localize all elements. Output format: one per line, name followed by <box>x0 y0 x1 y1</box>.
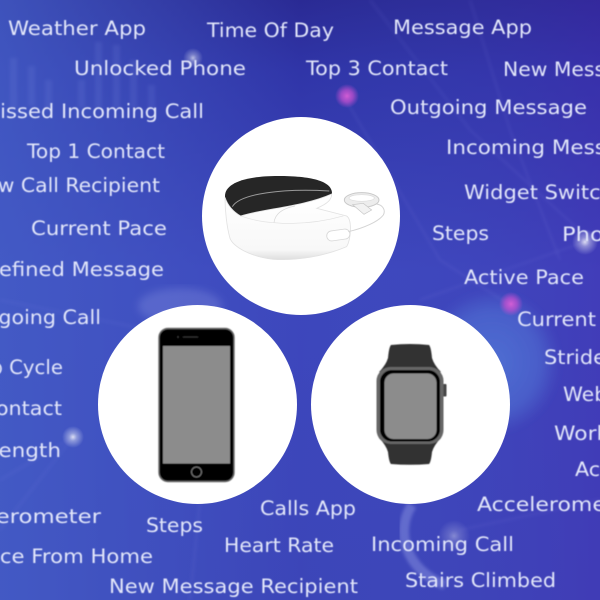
panel: watch device <box>311 305 510 504</box>
label: Widget Switch: Widget Switch <box>464 181 600 204</box>
label: Current: Current <box>517 308 596 331</box>
panel: phone device <box>98 305 297 504</box>
label: Current Pace: Current Pace <box>31 217 167 240</box>
label: Message App: Message App <box>393 16 532 39</box>
label: Incoming Call: Incoming Call <box>371 533 514 556</box>
label: Unlocked Phone: Unlocked Phone <box>74 57 246 80</box>
label: Active Pace: Active Pace <box>464 266 584 289</box>
label: New Message Recipient: New Message Recipient <box>109 575 358 598</box>
label: Heart Rate: Heart Rate <box>224 534 334 557</box>
icon: smartphone <box>159 328 234 482</box>
label: Calls App: Calls App <box>260 497 356 520</box>
label: Stairs Climbed: Stairs Climbed <box>405 569 556 592</box>
icon: smartwatch <box>376 344 446 465</box>
label: Outgoing Message: Outgoing Message <box>390 96 587 119</box>
label: Steps (bottom): Steps <box>146 514 203 537</box>
panel: chest strap device <box>202 117 400 315</box>
label: Time Of Day: Time Of Day <box>206 19 334 42</box>
icon: white chest strap with cable <box>225 176 384 260</box>
label: Steps: Steps <box>432 222 489 245</box>
label: Top 3 Contact: Top 3 Contact <box>305 57 448 80</box>
label: Weather App: Weather App <box>8 17 146 40</box>
label: Top 1 Contact: Top 1 Contact <box>26 140 165 163</box>
